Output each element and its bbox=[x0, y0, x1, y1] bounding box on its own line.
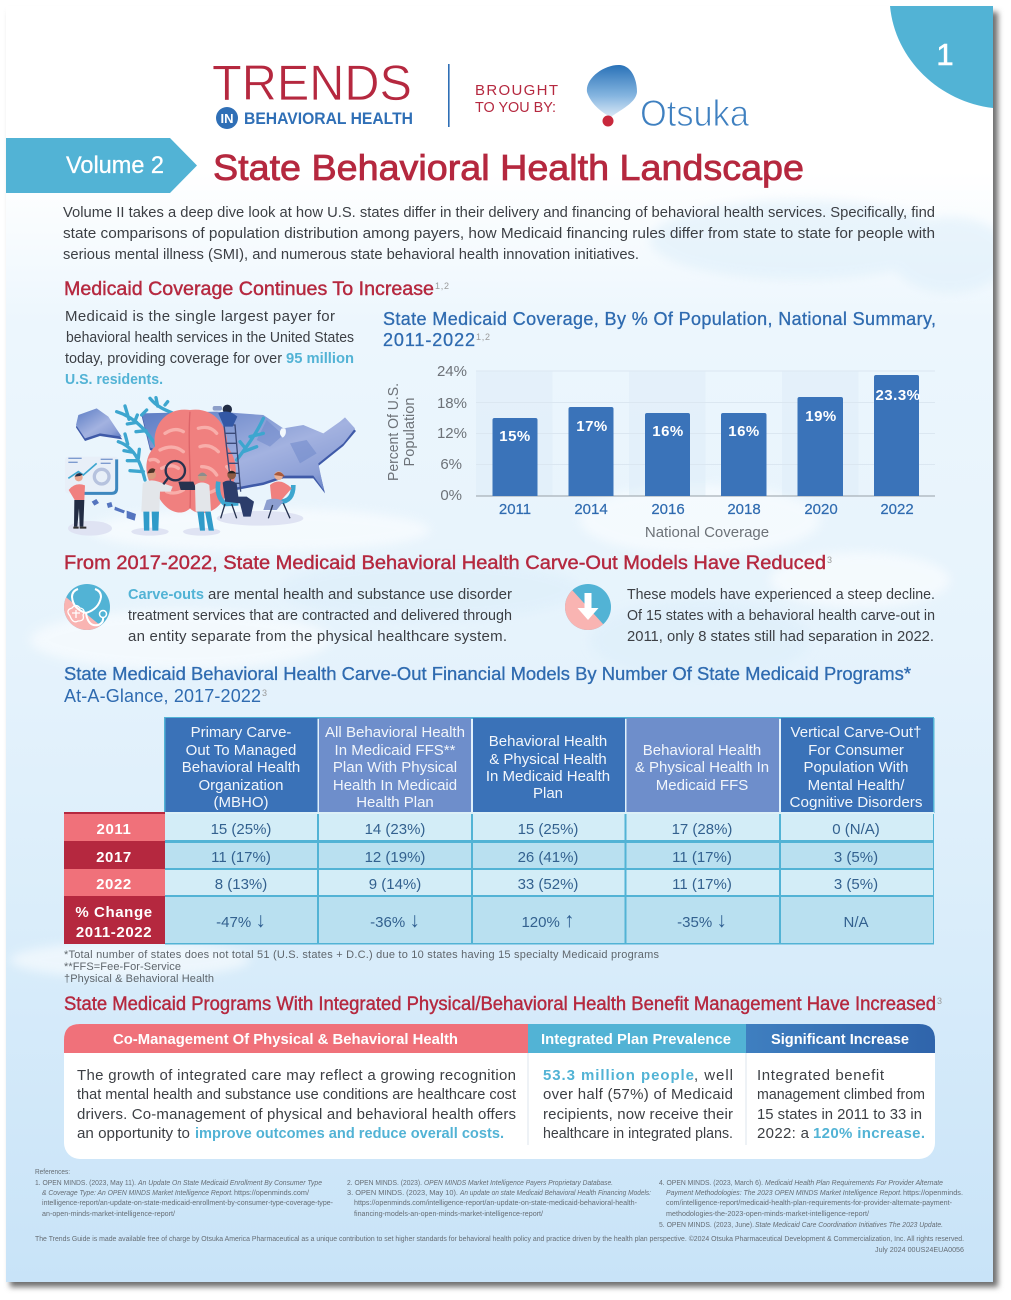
row 2022: 9 (14%) bbox=[369, 876, 421, 893]
row percent change bbox=[216, 909, 869, 932]
icon: woman with binoculars bbox=[213, 405, 237, 427]
panel header: co-management bbox=[64, 1024, 528, 1053]
table headers: Population With bbox=[803, 759, 909, 776]
table headers: Primary Carve- bbox=[191, 724, 291, 741]
icon: leaves bbox=[117, 398, 263, 480]
panel header: increase: Significant Increase bbox=[771, 1032, 909, 1048]
panel header: co-management: Co-Management Of Physical & Behavioral Health bbox=[113, 1032, 458, 1048]
row 2022: 3 (5%) bbox=[834, 876, 878, 893]
row 2011: 17 (28%) bbox=[672, 821, 732, 838]
icon: US map bbox=[142, 412, 356, 493]
table headers: Plan bbox=[533, 785, 563, 802]
footer disclaimer: July 2024 00US24EUA0056 bbox=[875, 1245, 964, 1254]
text: increase: 15 states in 2011 to 33 in bbox=[757, 1106, 922, 1123]
row 2017: 12 (19%) bbox=[365, 849, 425, 866]
text: Medicaid payer: 95 million bbox=[286, 350, 354, 367]
panel header: increase bbox=[746, 1024, 935, 1053]
row labels bbox=[64, 812, 165, 944]
row 2017 bbox=[211, 849, 878, 866]
text: Medicaid payer bbox=[65, 308, 354, 388]
reference 1 bbox=[35, 1178, 333, 1218]
table headers: Behavioral Health bbox=[643, 742, 761, 759]
logo: Trends in Behavioral Health: TRENDS bbox=[212, 55, 412, 111]
text: co-management: The growth of integrated care may reflect a growing recognition bbox=[77, 1067, 516, 1084]
x axis title: National Coverage bbox=[645, 524, 769, 541]
x axis labels: 2020 bbox=[804, 501, 838, 518]
y axis title: Percent Of U.S. bbox=[385, 383, 402, 481]
y axis labels: 18% bbox=[437, 395, 467, 412]
icon: down arrow bbox=[565, 584, 611, 630]
reference 1: https://openminds.com/ bbox=[234, 1188, 310, 1197]
text: models decline: 2011, only 8 states still had separation in 2022. bbox=[627, 628, 934, 645]
row 2011: 15 (25%) bbox=[211, 821, 271, 838]
row 2011: 15 (25%) bbox=[518, 821, 578, 838]
table headers: Health In Medicaid bbox=[333, 777, 457, 794]
table body cells bbox=[165, 812, 934, 944]
table headers: Vertical Carve-Out† bbox=[791, 724, 921, 741]
heading: carve-out models: 3 bbox=[827, 555, 832, 565]
text: models decline: Of 15 states with a behavioral health carve-out in bbox=[627, 607, 935, 624]
heading: table title bbox=[64, 664, 911, 706]
logo: Otsuka: Otsuka bbox=[640, 93, 749, 134]
table headers: Organization bbox=[198, 777, 284, 794]
text: carve-outs definition bbox=[128, 586, 512, 645]
heading: table title: 3 bbox=[262, 688, 267, 698]
text: increase: Integrated benefit bbox=[757, 1067, 885, 1084]
x axis labels: 2022 bbox=[880, 501, 914, 518]
intro text: state comparisons of population distribution among payers, how Medicaid financing rules differ from state to state for people with bbox=[63, 225, 935, 242]
references 2 and 3: OPEN MINDS Market Intelligence Payers Proprietary Database. bbox=[424, 1178, 613, 1187]
text: carve-outs definition: Carve-outs bbox=[128, 586, 204, 603]
y axis labels: 6% bbox=[440, 456, 462, 473]
icon: seated man bbox=[218, 471, 254, 518]
x axis labels: 2011 bbox=[499, 501, 531, 518]
table headers: In Medicaid Health bbox=[486, 768, 610, 785]
references 2 and 3: https://openminds.com/intelligence-report/an-update-on-state-medicaid-behavioral-health- bbox=[354, 1198, 637, 1207]
row percent change: -47% ↓ bbox=[216, 909, 266, 932]
icon: stethoscope and brain bbox=[64, 584, 110, 630]
references 4 and 5: com/intelligence-report/medicaid-health-plan-requirements-for-provider-alternate-payment- bbox=[666, 1198, 952, 1207]
y axis labels: 0% bbox=[440, 487, 462, 504]
icon: brain bbox=[146, 410, 236, 513]
intro text: serious mental illness (SMI), and numerous state behavioral health innovation initiatives. bbox=[63, 246, 639, 263]
row 2011: 14 (23%) bbox=[365, 821, 425, 838]
divider bbox=[448, 64, 450, 127]
corner page number tab: 1 bbox=[936, 37, 954, 72]
corner page number tab bbox=[890, 6, 993, 108]
row 2017: 26 (41%) bbox=[518, 849, 578, 866]
references 2 and 3 bbox=[347, 1178, 651, 1218]
table headers: (MBHO) bbox=[214, 794, 268, 811]
row labels: 2017 bbox=[96, 849, 132, 866]
text: co-management: drivers. Co-management of physical and behavioral health offers bbox=[77, 1106, 516, 1123]
value labels: 19% bbox=[805, 408, 837, 425]
table headers: Out To Managed bbox=[186, 742, 296, 759]
references 2 and 3: An update on state Medicaid Behavioral Health Financing Models: bbox=[459, 1188, 651, 1197]
references 4 and 5: State Medicaid Care Coordination Initiatives The 2023 Update. bbox=[755, 1220, 943, 1229]
text: models decline bbox=[627, 586, 935, 645]
table footnotes: †Physical & Behavioral Health bbox=[64, 973, 214, 985]
text: increase bbox=[757, 1067, 925, 1142]
references 4 and 5: Medicaid Health Plan Requirements For Provider Alternate bbox=[765, 1178, 943, 1187]
x axis labels: 2014 bbox=[574, 501, 608, 518]
row percent change: 120% ↑ bbox=[521, 909, 575, 932]
text: co-management: an opportunity to bbox=[77, 1125, 190, 1142]
references 4 and 5 bbox=[659, 1178, 963, 1229]
value labels: 16% bbox=[728, 423, 760, 440]
y axis labels: 12% bbox=[437, 425, 467, 442]
references 4 and 5: 5. OPEN MINDS. (2023, June). bbox=[659, 1220, 754, 1229]
row labels: 2011-2022 bbox=[76, 924, 152, 941]
intro text bbox=[63, 204, 935, 263]
text: increase: management climbed from bbox=[757, 1086, 925, 1103]
reference 1: intelligence-report/an-update-on-state-medicaid-enrollment-by-consumer-type-coverage-type- bbox=[42, 1198, 333, 1207]
reference 1: An Update On State Medicaid Enrollment By Consumer Type bbox=[137, 1178, 322, 1187]
table headers: & Physical Health bbox=[489, 751, 607, 768]
illustration: brain and US map with people bbox=[65, 398, 356, 536]
chart title bbox=[383, 309, 936, 350]
references bbox=[35, 1167, 963, 1229]
text: prevalence: over half (57%) of Medicaid bbox=[543, 1086, 733, 1103]
icon: ladder bbox=[224, 425, 241, 492]
table headers: Behavioral Health bbox=[182, 759, 300, 776]
table footnotes: *Total number of states does not total 51 (U.S. states + D.C.) due to 10 states having 15 specialty Medicaid programs bbox=[64, 949, 660, 961]
text: Medicaid payer: U.S. residents. bbox=[65, 371, 163, 388]
row 2017: 11 (17%) bbox=[211, 849, 271, 866]
heading: carve-out models: From 2017-2022, State Medicaid Behavioral Health Carve-Out Models Have Reduced bbox=[64, 553, 826, 574]
reference 1: & Coverage Type: An OPEN MINDS Market Intelligence Report. bbox=[42, 1188, 233, 1197]
value labels bbox=[499, 387, 921, 445]
heading: Medicaid coverage: 1,2 bbox=[435, 281, 449, 291]
row labels: 2022 bbox=[96, 876, 132, 893]
table headers: Plan With Physical bbox=[333, 759, 457, 776]
row 2017: 11 (17%) bbox=[672, 849, 732, 866]
table headers: In Medicaid FFS** bbox=[335, 742, 456, 759]
table headers: For Consumer bbox=[808, 742, 904, 759]
row 2022: 11 (17%) bbox=[672, 876, 732, 893]
text: prevalence bbox=[543, 1067, 733, 1142]
panel header: prevalence: Integrated Plan Prevalence bbox=[541, 1032, 731, 1048]
icon: Hawaii islands bbox=[92, 499, 136, 521]
text: increase: 2022: a bbox=[757, 1125, 810, 1142]
text: prevalence: healthcare in integrated plans. bbox=[543, 1125, 733, 1142]
volume banner bbox=[6, 138, 197, 193]
y axis labels: 24% bbox=[437, 363, 467, 380]
brought to you by: TO YOU BY: bbox=[475, 99, 556, 116]
icon: woman at dashboard bbox=[69, 473, 86, 529]
logo: Otsuka bbox=[587, 65, 749, 134]
references 2 and 3: 3. OPEN MINDS. (2023, May 10). bbox=[347, 1188, 458, 1197]
chart title: State Medicaid Coverage, By % Of Population, National Summary, bbox=[383, 309, 936, 329]
reference 1: an-open-minds-market-intelligence-report/ bbox=[42, 1209, 176, 1218]
table headers: Medicaid FFS bbox=[656, 777, 748, 794]
x axis labels: 2016 bbox=[651, 501, 685, 518]
brought to you by: BROUGHT bbox=[475, 82, 558, 99]
table headers: All Behavioral Health bbox=[325, 724, 465, 741]
volume banner: Volume 2 bbox=[66, 152, 164, 179]
y axis title bbox=[385, 383, 418, 481]
text: carve-outs definition: are mental health and substance use disorder bbox=[208, 586, 512, 603]
table headers: Health Plan bbox=[356, 794, 434, 811]
text: increase: 120% increase. bbox=[813, 1125, 925, 1142]
references 2 and 3: financing-models-an-open-minds-market-intelligence-report/ bbox=[354, 1209, 544, 1218]
text: co-management: that mental health and substance use conditions are healthcare cost bbox=[77, 1086, 517, 1103]
table footnotes bbox=[64, 949, 660, 985]
row labels: 2011 bbox=[97, 821, 131, 838]
text: Medicaid payer: Medicaid is the single largest payer for bbox=[65, 308, 335, 325]
text: models decline: These models have experienced a steep decline. bbox=[627, 586, 935, 603]
chart title: 1,2 bbox=[476, 332, 490, 342]
heading: Medicaid coverage: Medicaid Coverage Continues To Increase bbox=[64, 279, 434, 300]
heading: table title: At-A-Glance, 2017-2022 bbox=[64, 686, 261, 706]
icon: doctor with laptop bbox=[178, 472, 214, 531]
row 2017: 3 (5%) bbox=[834, 849, 878, 866]
panel header: prevalence bbox=[528, 1024, 746, 1053]
row percent change: N/A bbox=[843, 914, 869, 931]
row 2022: 8 (13%) bbox=[215, 876, 267, 893]
reference 1: 1. OPEN MINDS. (2023, May 11). bbox=[35, 1178, 136, 1187]
table headers: Cognitive Disorders bbox=[790, 794, 922, 811]
footer disclaimer bbox=[35, 1234, 964, 1254]
table headers: Behavioral Health bbox=[489, 733, 607, 750]
brought to you by bbox=[475, 82, 558, 116]
table footnotes: **FFS=Fee-For-Service bbox=[64, 961, 181, 973]
logo: Trends in Behavioral Health: IN bbox=[220, 111, 234, 126]
references 2 and 3: 2. OPEN MINDS. (2023). bbox=[347, 1178, 422, 1187]
heading: integrated programs: State Medicaid Programs With Integrated Physical/Behavioral Health Benefit Management Have Increased bbox=[64, 994, 936, 1015]
x axis labels: 2018 bbox=[727, 501, 761, 518]
bars bbox=[492, 375, 919, 496]
table: financial models bbox=[64, 717, 934, 944]
row labels: % Change bbox=[75, 904, 153, 921]
value labels: 17% bbox=[576, 418, 608, 435]
references: References: bbox=[35, 1167, 70, 1176]
value labels: 16% bbox=[652, 423, 684, 440]
icon: doctor with magnifier bbox=[141, 461, 185, 531]
y axis title: Population bbox=[401, 398, 418, 466]
icon: Alaska bbox=[76, 408, 122, 441]
value labels: 23.3% bbox=[875, 387, 921, 404]
references 4 and 5: Payment Methodologies: The 2023 OPEN MINDS Market Intelligence Report. bbox=[666, 1188, 902, 1197]
row 2011 bbox=[211, 821, 880, 838]
table headers bbox=[164, 717, 934, 813]
row percent change: -36% ↓ bbox=[370, 909, 420, 932]
references 4 and 5: https://openminds. bbox=[903, 1188, 963, 1197]
text: prevalence: 53.3 million people bbox=[543, 1067, 694, 1084]
table headers: Mental Health/ bbox=[808, 777, 905, 794]
references 4 and 5: 4. OPEN MINDS. (2023, March 6). bbox=[659, 1178, 763, 1187]
x axis labels bbox=[499, 501, 914, 518]
icon: dashboard bbox=[65, 457, 118, 493]
text: carve-outs definition: treatment services that are contracted and delivered through bbox=[128, 607, 512, 624]
chart title: 2011-2022 bbox=[383, 330, 475, 350]
title: State Behavioral Health Landscape bbox=[213, 147, 804, 188]
text: Medicaid payer: behavioral health services in the United States bbox=[66, 329, 354, 346]
panel: integrated care bbox=[64, 1024, 935, 1159]
text: prevalence: , well bbox=[694, 1067, 733, 1084]
text: Medicaid payer: today, providing coverage for over bbox=[65, 350, 282, 367]
text: carve-outs definition: an entity separate from the physical healthcare system. bbox=[128, 628, 507, 645]
heading: table title: State Medicaid Behavioral Health Carve-Out Financial Models By Number Of State Medicaid Programs* bbox=[64, 664, 911, 684]
row 2022: 33 (52%) bbox=[518, 876, 578, 893]
intro text: Volume II takes a deep dive look at how U.S. states differ in their delivery and financing of behavioral health services. Specifically, find bbox=[63, 204, 935, 221]
value labels: 15% bbox=[499, 428, 531, 445]
logo: Trends in Behavioral Health: BEHAVIORAL HEALTH bbox=[244, 110, 413, 128]
references 4 and 5: methodologies-the-2023-open-minds-market-intelligence-report/ bbox=[666, 1209, 870, 1218]
row 2011: 0 (N/A) bbox=[832, 821, 880, 838]
y axis labels bbox=[437, 363, 467, 504]
icon: ground shadows bbox=[68, 511, 303, 536]
row 2022 bbox=[215, 876, 878, 893]
text: co-management: improve outcomes and reduce overall costs. bbox=[195, 1125, 504, 1142]
text: co-management bbox=[77, 1067, 517, 1142]
heading: integrated programs: 3 bbox=[937, 996, 942, 1006]
table headers: & Physical Health In bbox=[635, 759, 769, 776]
text: prevalence: recipients, now receive their bbox=[543, 1106, 733, 1123]
icon: seated woman bbox=[263, 471, 293, 518]
bar chart: Medicaid coverage bbox=[385, 363, 935, 541]
row percent change: -35% ↓ bbox=[677, 909, 727, 932]
